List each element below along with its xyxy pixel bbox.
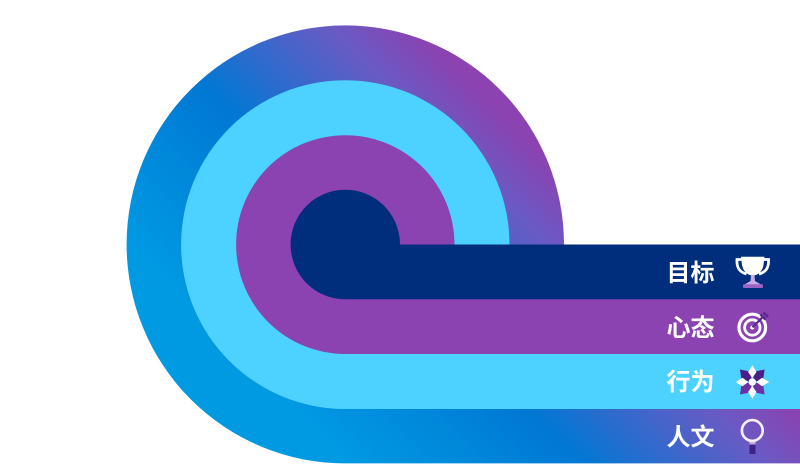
band: 行为 light blue ring xyxy=(181,80,800,409)
icon: flower xyxy=(736,365,769,399)
band: 人文 gradient ring xyxy=(127,25,800,463)
icon: target with dart xyxy=(739,312,768,341)
label: 目标: 目标 xyxy=(666,260,714,287)
icon: magnifier xyxy=(742,420,763,454)
label: 心态: 心态 xyxy=(666,315,714,342)
icon: trophy xyxy=(737,257,769,288)
label: 行为: 行为 xyxy=(666,369,714,396)
band: 目标 navy core xyxy=(291,190,800,299)
label: 人文: 人文 xyxy=(666,423,714,451)
band: 心态 purple ring xyxy=(236,135,800,354)
